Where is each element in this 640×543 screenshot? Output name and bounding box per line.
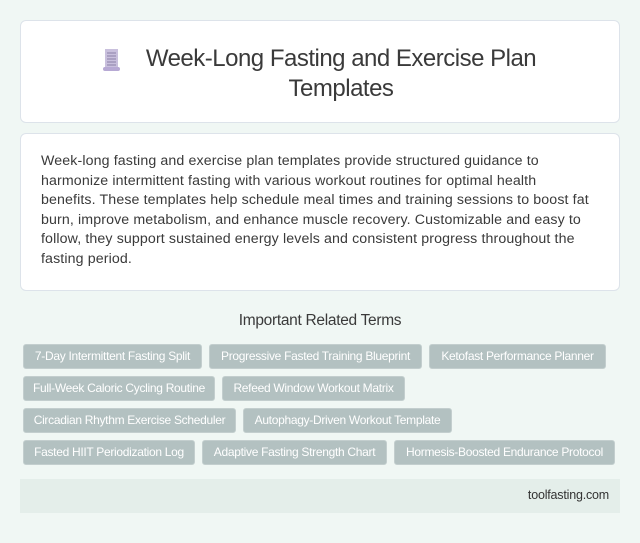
title: Week-Long Fasting and Exercise Plan Templates xyxy=(146,45,536,102)
tag: Adaptive Fasting Strength Chart xyxy=(214,445,375,459)
tag xyxy=(429,344,606,369)
description text: harmonize intermittent fasting with various workout routines for optimal health xyxy=(41,173,536,189)
tag: Progressive Fasted Training Blueprint xyxy=(221,349,410,363)
description text: Week-long fasting and exercise plan templates provide structured guidance to xyxy=(41,153,539,169)
description text: benefits. These templates help schedule meal times and training sessions to boost fat xyxy=(41,192,589,208)
tag xyxy=(23,376,215,401)
description text: follow, they support sustained energy levels and consistent progress throughout the xyxy=(41,231,575,247)
tag xyxy=(23,440,195,465)
tag: Refeed Window Workout Matrix xyxy=(233,381,394,395)
tag: Hormesis-Boosted Endurance Protocol xyxy=(406,445,603,459)
description card xyxy=(20,133,620,291)
tag xyxy=(202,440,387,465)
footer xyxy=(20,479,620,513)
footer text: toolfasting.com xyxy=(528,488,609,502)
tag: Circadian Rhythm Exercise Scheduler xyxy=(34,413,225,427)
icon: document scroll xyxy=(103,49,120,71)
tag xyxy=(23,408,236,433)
tag xyxy=(394,440,615,465)
tag: Autophagy-Driven Workout Template xyxy=(255,413,440,427)
tag xyxy=(209,344,422,369)
tag: Full-Week Caloric Cycling Routine xyxy=(33,381,205,395)
tag xyxy=(243,408,452,433)
related terms heading: Important Related Terms xyxy=(239,312,401,329)
tag: Ketofast Performance Planner xyxy=(441,349,594,363)
description text: fasting period. xyxy=(41,251,132,267)
tag xyxy=(222,376,405,401)
description text: burn, improve metabolism, and enhance muscle recovery. Customizable and easy to xyxy=(41,212,581,228)
tag: 7-Day Intermittent Fasting Split xyxy=(35,349,190,363)
tag: Fasted HIIT Periodization Log xyxy=(34,445,184,459)
tag xyxy=(23,344,202,369)
header card xyxy=(20,20,620,123)
description text xyxy=(41,153,589,267)
